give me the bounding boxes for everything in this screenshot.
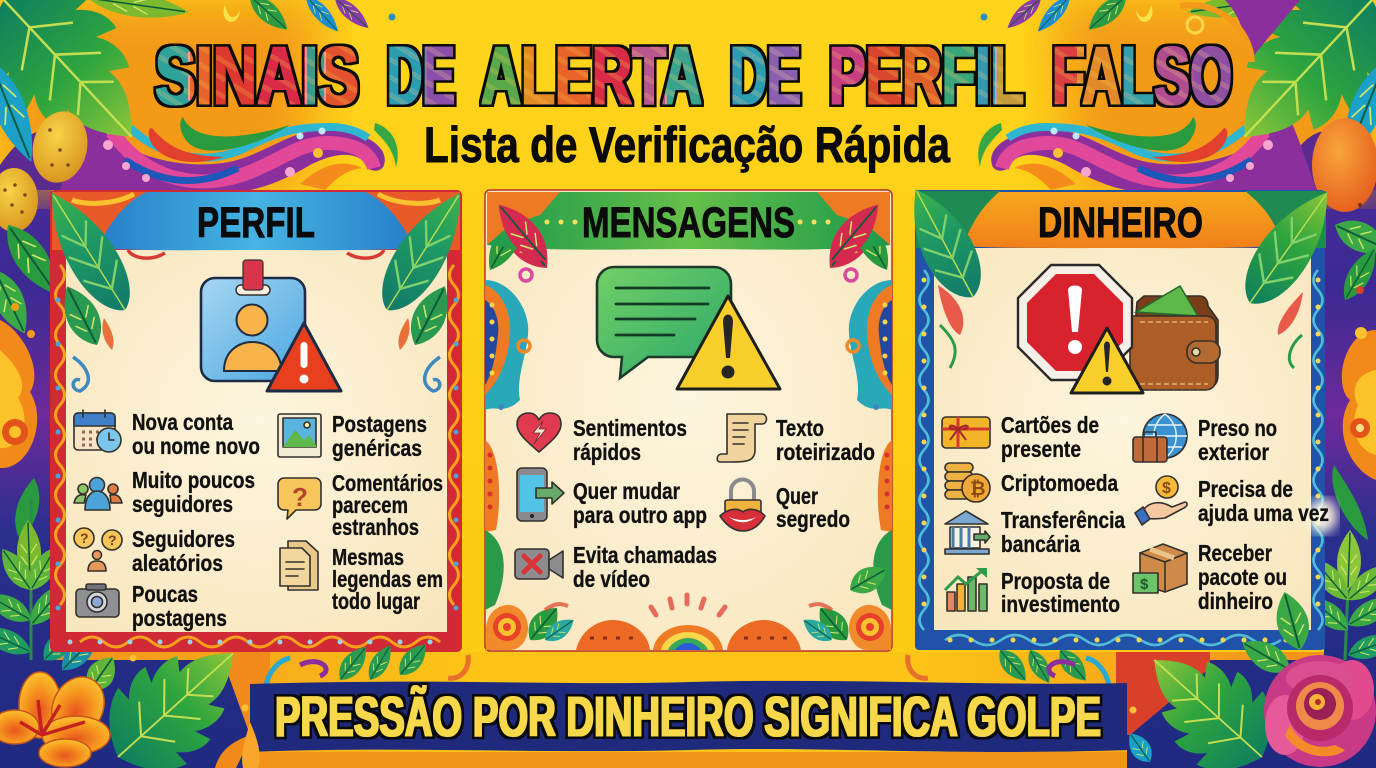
item: cartoes de presente: Cartões de (1001, 412, 1099, 438)
decoration: top-right purple swirl (1180, 0, 1300, 62)
item: comentarios estranhos: parecem (332, 492, 408, 518)
item: preso no exterior (1133, 414, 1277, 465)
title (155, 29, 1232, 122)
title: FALSO (1052, 29, 1232, 122)
item: mudar para outro app (517, 468, 707, 528)
item: poucas postagens (76, 581, 227, 631)
panel: perfil (32, 180, 480, 652)
item: precisa de ajuda: ajuda uma vez (1198, 500, 1329, 526)
item: precisa de ajuda (1135, 476, 1329, 526)
item: comentarios estranhos (278, 470, 443, 540)
item: poucas postagens: Poucas (132, 581, 198, 607)
title: PERFIL (829, 29, 1024, 122)
item: mesmas legendas: legendas em (332, 566, 443, 592)
title: ALERTA (481, 29, 702, 122)
item: seguidores aleatorios (74, 526, 235, 576)
item: comentarios estranhos: estranhos (332, 514, 419, 540)
item: postagens genericas (278, 411, 427, 461)
panel leaves (894, 178, 1348, 654)
item: evita chamadas de video (515, 542, 717, 592)
item: mesmas legendas: todo lugar (332, 588, 420, 614)
item: quer segredo: Quer (776, 483, 818, 509)
item: seguidores aleatorios: Seguidores (132, 526, 235, 552)
item: criptomoeda: Criptomoeda (1001, 470, 1118, 496)
item: nova conta: ou nome novo (132, 433, 260, 459)
heading: perfil: PERFIL (197, 199, 315, 247)
panel header band (487, 192, 890, 250)
item: mesmas legendas: Mesmas (332, 544, 404, 570)
panel header band (52, 192, 460, 250)
icon: fake id badge with warning (201, 260, 341, 391)
panel header band (925, 192, 1320, 248)
panel side borders (480, 192, 650, 650)
item: muito poucos seguidores (74, 467, 255, 517)
icon: stop sign and wallet (1018, 265, 1220, 393)
item: postagens genericas: genéricas (332, 435, 422, 461)
panel leaves (32, 180, 480, 391)
item: sentimentos rapidos (517, 413, 687, 465)
item: muito poucos seguidores: seguidores (132, 491, 233, 517)
panel: dinheiro (894, 178, 1348, 654)
item: mudar para outro app: para outro app (573, 502, 707, 528)
item: preso no exterior: exterior (1198, 439, 1269, 465)
decoration: small bottom leaves (265, 638, 1110, 690)
item: preso no exterior: Preso no (1198, 415, 1277, 441)
item: evita chamadas de video: de vídeo (573, 566, 650, 592)
item: transferencia bancaria: Transferência (1001, 507, 1125, 533)
glow overflow behind text (1307, 499, 1337, 533)
item: receber pacote: Receber (1198, 540, 1272, 566)
item: criptomoeda: ₿ (970, 479, 985, 500)
item: sentimentos rapidos: Sentimentos (573, 415, 687, 441)
item: muito poucos seguidores: Muito poucos (132, 467, 255, 493)
item: seguidores aleatorios: aleatórios (132, 550, 223, 576)
item: seguidores aleatorios: ? (80, 530, 89, 546)
subtitle: Lista de Verificação Rápida (424, 117, 951, 173)
item: seguidores aleatorios: ? (108, 532, 117, 548)
item: quer segredo (720, 480, 850, 532)
bottom banner (250, 681, 1127, 752)
icon: chat bubble with warning (597, 267, 780, 389)
title: DE (387, 29, 455, 122)
item: cartoes de presente: presente (1001, 436, 1081, 462)
decoration: rainbow arc (651, 559, 892, 650)
decoration: top-right tropical corner (978, 0, 1376, 190)
panel side borders mirrored (727, 192, 897, 650)
panel: mensagens (480, 190, 897, 651)
icon: orange fruit (1312, 118, 1376, 212)
item: receber pacote (1133, 540, 1287, 614)
item: receber pacote: dinheiro (1198, 588, 1273, 614)
item: mudar para outro app: Quer mudar (573, 478, 680, 504)
item: texto roteirizado: roteirizado (776, 439, 875, 465)
heading: dinheiro: DINHEIRO (1038, 199, 1203, 247)
icon: mangoes (0, 106, 94, 232)
item: comentarios estranhos: Comentários (332, 470, 443, 496)
title: SINAIS (155, 29, 359, 122)
title: DE (730, 29, 801, 122)
item: transferencia bancaria: bancária (1001, 531, 1080, 557)
item: evita chamadas de video: Evita chamadas (573, 542, 717, 568)
item: texto roteirizado: Texto (776, 415, 824, 441)
item: sentimentos rapidos: rápidos (573, 439, 641, 465)
item: texto roteirizado (717, 414, 875, 465)
item: postagens genericas: Postagens (332, 411, 427, 437)
item: proposta de investimento (945, 568, 1120, 617)
decoration: bottom-right monstera (1121, 623, 1297, 768)
heading: mensagens: MENSAGENS (582, 199, 795, 247)
item: mesmas legendas (280, 541, 443, 614)
decoration: right side foliage (1303, 212, 1376, 665)
decoration: left side foliage (0, 216, 105, 678)
item: proposta de investimento: Proposta de (1001, 568, 1110, 594)
decoration: top-left tropical corner (0, 0, 398, 190)
item: receber pacote: pacote ou (1198, 564, 1287, 590)
item: precisa de ajuda: $ (1162, 480, 1171, 497)
item: transferencia bancaria (945, 507, 1125, 557)
item: poucas postagens: postagens (132, 605, 227, 631)
item: receber pacote: $ (1140, 576, 1149, 593)
decoration: bottom-left monstera (79, 615, 268, 768)
icon: orange flower (0, 668, 114, 767)
item: precisa de ajuda: Precisa de (1198, 476, 1293, 502)
item: proposta de investimento: investimento (1001, 591, 1120, 617)
item: nova conta: Nova conta (132, 409, 233, 435)
item: criptomoeda (945, 463, 1118, 502)
item: nova conta (74, 409, 260, 459)
item: comentarios estranhos: ? (292, 482, 308, 512)
item: cartoes de presente (942, 412, 1099, 462)
icon: pink rose (1264, 655, 1376, 767)
item: quer segredo: segredo (776, 506, 850, 532)
